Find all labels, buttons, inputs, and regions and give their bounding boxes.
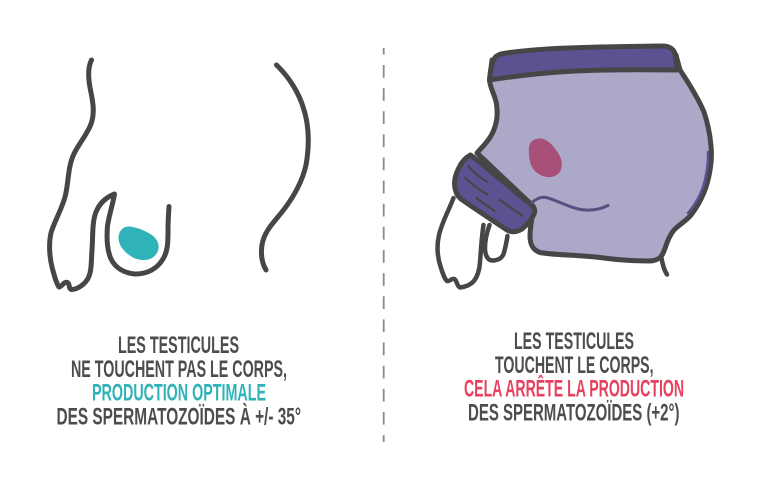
dashed divider: [383, 48, 385, 442]
cuff stitches: [465, 166, 522, 216]
crease line: [532, 197, 608, 210]
left illustration: naked body: [50, 60, 308, 290]
short leg line: [662, 258, 667, 274]
outline: front of the body, penis and scrotum: [50, 60, 169, 290]
caption: right panel: LES TESTICULES: [514, 328, 634, 355]
right illustration: body wearing tight underwear: [438, 46, 711, 288]
caption: right panel: TOUCHENT LE CORPS,: [495, 352, 654, 379]
thigh cuff: [454, 155, 535, 232]
icon: teal testicle: [118, 226, 159, 260]
outline: back of the body: [261, 65, 308, 270]
underwear body: [477, 55, 711, 261]
caption: left panel: [56, 332, 301, 430]
caption: left panel: LES TESTICULES: [118, 332, 239, 359]
waistband: [490, 46, 677, 80]
caption: left panel: DES SPERMATOZOÏDES À +/- 35°: [56, 402, 301, 430]
caption: left panel: NE TOUCHENT PAS LE CORPS,: [71, 356, 287, 383]
icon: magenta testicle: [529, 138, 562, 177]
inner shading along the back: [688, 152, 708, 213]
caption: right panel: [464, 328, 684, 426]
penis outline: [438, 198, 484, 288]
testicle outline: [485, 225, 508, 260]
caption: left panel: PRODUCTION OPTIMALE: [92, 380, 266, 406]
